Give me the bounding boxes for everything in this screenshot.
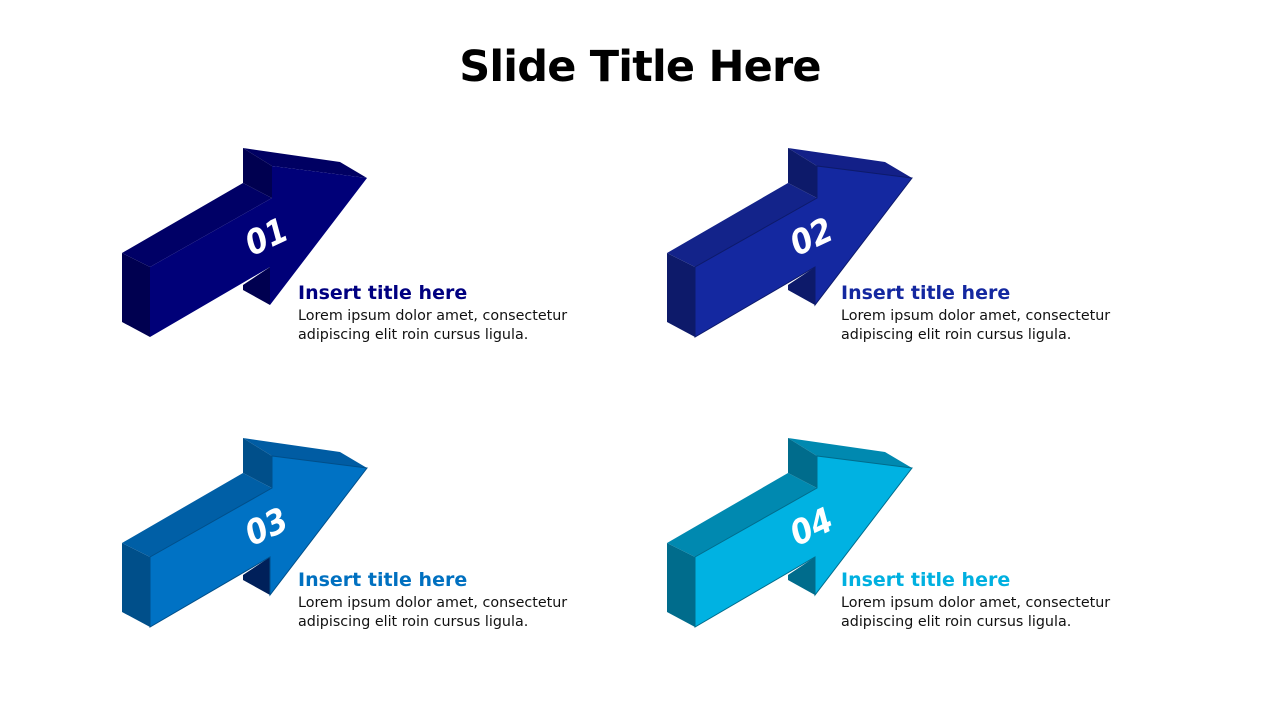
arrow 04: 04 xyxy=(784,500,839,554)
text block 04: Lorem ipsum dolor amet, consectetur adipiscing elit roin cursus ligula. xyxy=(841,595,1110,630)
arrow 01: 01 xyxy=(239,210,294,264)
arrow 01 xyxy=(122,148,367,337)
title: Slide Title Here xyxy=(459,42,821,92)
text block 03: Lorem ipsum dolor amet, consectetur adipiscing elit roin cursus ligula. xyxy=(298,595,567,630)
arrow 04 xyxy=(667,438,912,627)
text block 02: Insert title here xyxy=(841,282,1010,304)
arrow 02 xyxy=(667,148,912,337)
text block 02 xyxy=(841,282,1110,343)
text block 01 xyxy=(298,282,568,343)
text block 03 xyxy=(298,569,568,630)
arrow 02: 02 xyxy=(784,210,839,264)
text block 01: Insert title here xyxy=(298,282,467,304)
text block 04 xyxy=(841,569,1110,630)
text block 01: Lorem ipsum dolor amet, consectetur adipiscing elit roin cursus ligula. xyxy=(298,308,567,343)
arrow 03: 03 xyxy=(239,500,294,554)
arrow 03 xyxy=(122,438,367,627)
text block 03: Insert title here xyxy=(298,569,467,591)
text block 02: Lorem ipsum dolor amet, consectetur adipiscing elit roin cursus ligula. xyxy=(841,308,1110,343)
text block 04: Insert title here xyxy=(841,569,1010,591)
